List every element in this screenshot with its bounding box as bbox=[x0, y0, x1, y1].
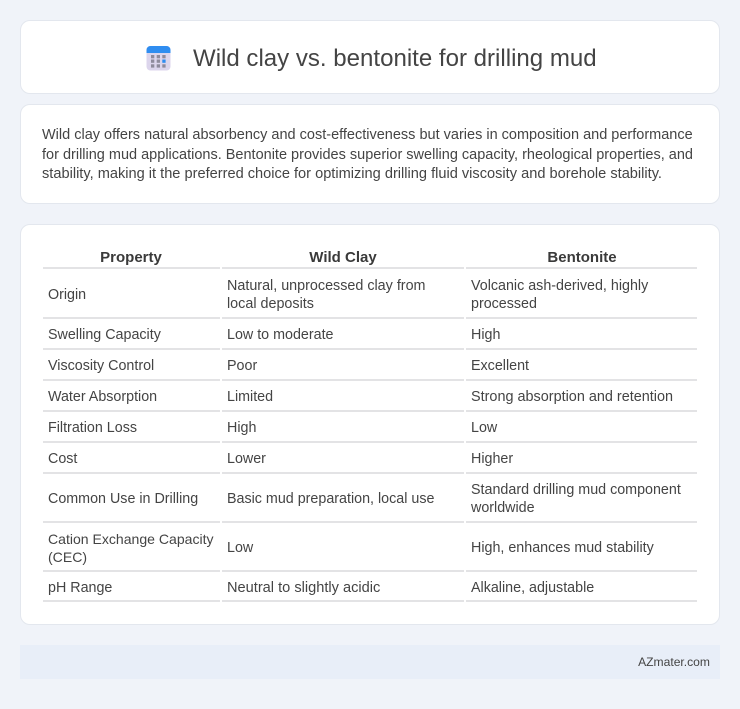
comparison table: Neutral to slightly acidic bbox=[227, 580, 380, 596]
row: Filtration Loss: Filtration Loss bbox=[48, 420, 137, 436]
comparison table: High bbox=[471, 327, 500, 343]
comparison table: Volcanic ash-derived, highly bbox=[471, 278, 648, 294]
comparison table: Low bbox=[471, 420, 497, 436]
intro paragraph: for drilling mud applications. Bentonite provides superior swelling capacity, rheological properties, and bbox=[42, 146, 693, 162]
header: Bentonite: Bentonite bbox=[547, 249, 617, 266]
icon: calendar bbox=[146, 46, 170, 70]
comparison table: Excellent bbox=[471, 358, 529, 374]
comparison table: High bbox=[227, 420, 256, 436]
comparison table: processed bbox=[471, 296, 537, 312]
comparison table: Basic mud preparation, local use bbox=[227, 491, 434, 507]
intro paragraph: stability, making it the preferred choice for optimizing drilling fluid viscosity and borehole stability. bbox=[42, 166, 662, 182]
comparison table: worldwide bbox=[471, 500, 535, 516]
row: Cation Exchange Capacity bbox=[48, 531, 214, 565]
comparison table: High, enhances mud stability bbox=[471, 540, 654, 556]
comparison table: Standard drilling mud component bbox=[471, 482, 681, 498]
row: Viscosity Control: Viscosity Control bbox=[48, 358, 154, 374]
row: Common Use in Drilling: Common Use in Drilling bbox=[48, 491, 198, 507]
title: Wild clay vs. bentonite for drilling mud bbox=[193, 45, 597, 72]
comparison table: Poor bbox=[227, 358, 257, 374]
header: Wild Clay: Wild Clay bbox=[309, 249, 377, 266]
comparison table: Alkaline, adjustable bbox=[471, 580, 594, 596]
intro text panel bbox=[20, 104, 720, 204]
comparison table: Lower bbox=[227, 451, 266, 467]
comparison table: Limited bbox=[227, 389, 273, 405]
title card bbox=[20, 20, 720, 94]
intro paragraph bbox=[42, 127, 693, 182]
footer credit: AZmater.com bbox=[638, 655, 710, 669]
row: Cost: Cost bbox=[48, 451, 77, 467]
intro paragraph: Wild clay offers natural absorbency and cost-effectiveness but varies in composition and performance bbox=[42, 127, 693, 143]
row: Cation Exchange Capacity: Cation Exchange Capacity bbox=[48, 531, 214, 547]
row: Water Absorption: Water Absorption bbox=[48, 389, 157, 405]
comparison table panel bbox=[20, 224, 720, 625]
comparison table: Low to moderate bbox=[227, 327, 334, 343]
header: Property: Property bbox=[100, 249, 162, 266]
row: pH Range: pH Range bbox=[48, 580, 112, 596]
row: Origin: Origin bbox=[48, 287, 86, 303]
comparison table: Natural, unprocessed clay from bbox=[227, 278, 426, 294]
comparison table: Higher bbox=[471, 451, 513, 467]
footer bar bbox=[20, 645, 720, 679]
row: Swelling Capacity: Swelling Capacity bbox=[48, 327, 161, 343]
comparison table: Low bbox=[227, 540, 253, 556]
comparison table: Strong absorption and retention bbox=[471, 389, 673, 405]
comparison table: local deposits bbox=[227, 296, 314, 312]
row: Cation Exchange Capacity: (CEC) bbox=[48, 549, 87, 565]
